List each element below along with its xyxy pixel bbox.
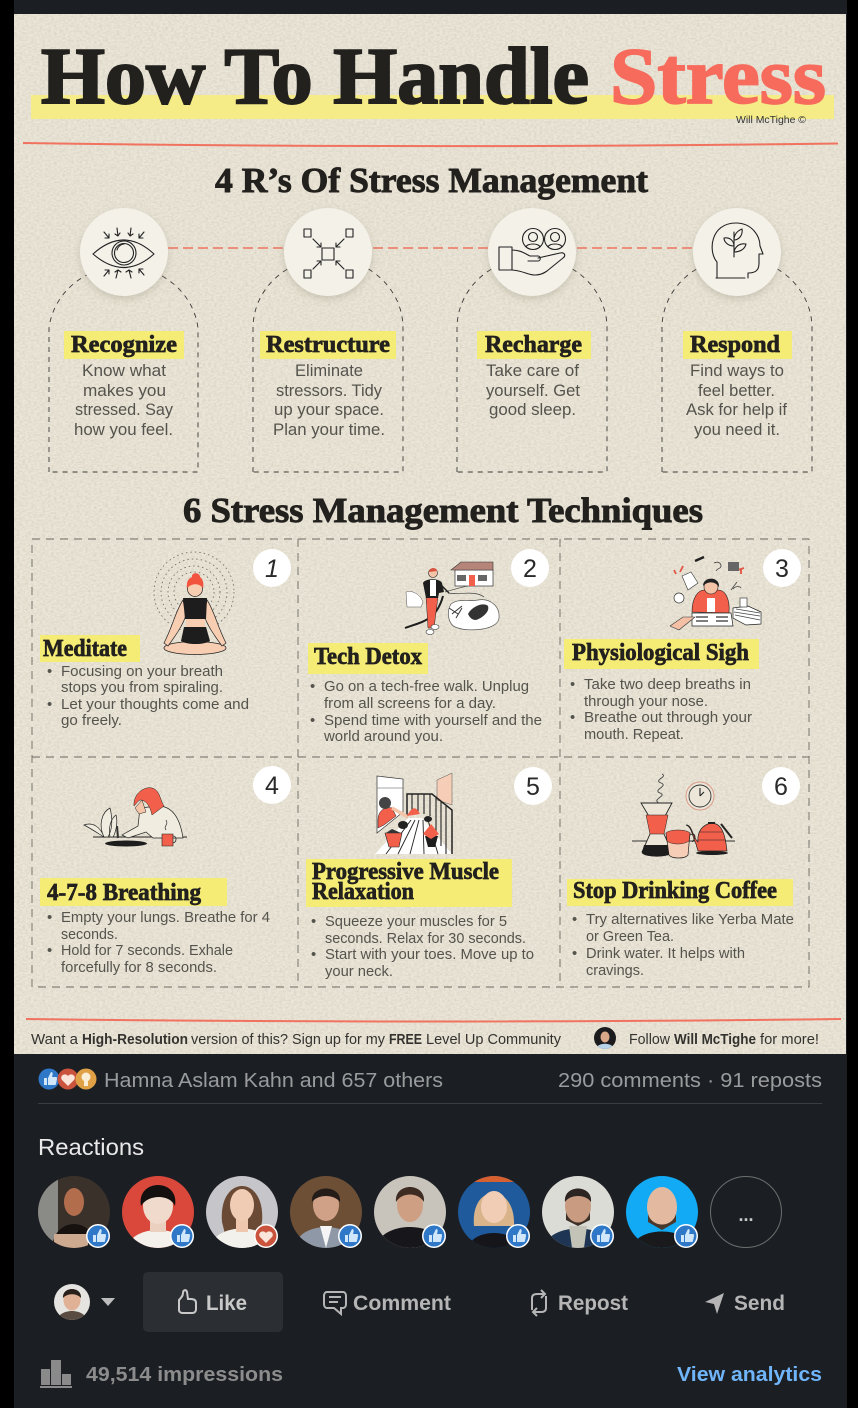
- description: Restructure: Eliminate: [295, 361, 363, 380]
- panel: technique 2 Tech Detox: [308, 549, 549, 745]
- text: Breathing bullets: forcefully for 8 seconds.: [61, 960, 217, 976]
- panel: technique 5 Progressive Muscle Relaxation: [306, 767, 552, 980]
- illustration: balcony with plants: [375, 773, 452, 854]
- number badge 2: 2: [523, 555, 537, 583]
- description: Recharge: [486, 361, 580, 419]
- text: Physiological Sigh bullets: •: [570, 677, 575, 693]
- label: Recognize: Recognize: [71, 332, 177, 358]
- button: Repost: Repost: [558, 1292, 628, 1315]
- reaction icons: [38, 1068, 96, 1090]
- panel: Recharge: [457, 208, 607, 472]
- label: Restructure: Restructure: [266, 332, 390, 358]
- text: Coffee bullets: cravings.: [586, 963, 644, 979]
- text: Physiological Sigh bullets: Take two deep breaths in: [584, 677, 751, 693]
- connector: dashed red line: [168, 247, 692, 249]
- description: Recharge: Take care of: [486, 361, 579, 380]
- reactions heading: Reactions: [38, 1134, 144, 1160]
- text: Tech Detox bullets: [310, 679, 542, 745]
- label: Stop Drinking Coffee: Stop Drinking Coffee: [573, 878, 777, 904]
- label: Tech Detox: Tech Detox: [314, 644, 422, 670]
- text: Muscle Relaxation bullets: •: [311, 947, 316, 963]
- number badge 1: 1: [265, 555, 279, 583]
- text: Coffee bullets: Drink water. It helps with: [586, 946, 745, 962]
- text: Physiological Sigh bullets: Breathe out through your: [584, 710, 752, 726]
- text: Meditate bullets: [47, 664, 249, 729]
- text: Tech Detox bullets: Spend time with yourself and the: [324, 713, 542, 729]
- avatar 2: [122, 1176, 194, 1248]
- text: Meditate bullets: •: [47, 664, 52, 680]
- text: Breathing bullets: Empty your lungs. Breathe for 4: [61, 910, 270, 926]
- label: Progressive Muscle Relaxation: Progressive Muscle: [312, 859, 499, 885]
- text: Physiological Sigh bullets: •: [570, 710, 575, 726]
- bottom red divider: [26, 1019, 841, 1022]
- text: Physiological Sigh bullets: mouth. Repeat.: [584, 727, 684, 743]
- button: Send: Send: [734, 1292, 785, 1315]
- title: [31, 33, 834, 121]
- text: Meditate bullets: stops you from spiraling.: [61, 680, 223, 696]
- view analytics link: View analytics: [677, 1364, 822, 1386]
- label: Recharge: Recharge: [485, 332, 582, 358]
- arch outline: [662, 258, 812, 472]
- arch outline: [49, 266, 198, 472]
- icon circle: eye: [80, 208, 168, 299]
- number badge 6: 6: [774, 773, 788, 801]
- reactions summary: Hamna Aslam Kahn and 657 others: [104, 1070, 443, 1092]
- avatar 1: [38, 1176, 110, 1248]
- illustration: meditating woman: [154, 552, 234, 654]
- description: Restructure: stressors. Tidy: [276, 381, 382, 400]
- footer sign-up line: Level Up Community: [426, 1031, 561, 1048]
- footer sign-up line: Want a: [31, 1031, 79, 1048]
- footer sign-up line: High-Resolution: [82, 1031, 188, 1048]
- author credit: Will McTighe ©: [736, 115, 807, 126]
- impressions count: 49,514 impressions: [86, 1364, 283, 1386]
- heading: 6 techniques: 6 Stress Management Techniques: [183, 491, 703, 530]
- text: Tech Detox bullets: •: [310, 713, 315, 729]
- panel: technique 3 Physiological Sigh: [564, 549, 801, 743]
- number badge 2: [511, 549, 549, 587]
- description: Recharge: good sleep.: [489, 400, 576, 419]
- description: Respond: Ask for help if: [686, 400, 787, 419]
- avatar 7: [542, 1176, 614, 1248]
- title highlight band: [31, 95, 834, 119]
- avatar 4: [290, 1176, 362, 1248]
- button: Like: Like: [206, 1292, 247, 1315]
- description: Recognize: stressed. Say: [75, 400, 173, 419]
- text: Muscle Relaxation bullets: [311, 914, 534, 980]
- avatar 3: [206, 1176, 278, 1248]
- text: Tech Detox bullets: world around you.: [323, 729, 443, 745]
- illustration: stressed student at desk: [670, 557, 761, 630]
- number badge 1: [253, 549, 291, 587]
- description: Recognize: Know what: [82, 361, 166, 380]
- text: Breathing bullets: [47, 910, 270, 976]
- arch outline: [457, 258, 607, 472]
- panel: technique 4 Breathing: [40, 766, 291, 976]
- number badge 6: [762, 767, 800, 805]
- footer sign-up line: [31, 1031, 561, 1048]
- button: Comment: Comment: [353, 1292, 451, 1315]
- more reactions button: [710, 1176, 782, 1248]
- footer follow line: Follow: [629, 1031, 670, 1048]
- footer follow line: Will McTighe: [674, 1031, 756, 1048]
- text: Meditate bullets: •: [47, 697, 52, 713]
- current user avatar: [54, 1284, 90, 1320]
- title dark words: How To Handle: [41, 33, 589, 121]
- text: Coffee bullets: •: [572, 946, 577, 962]
- label: Progressive Muscle Relaxation: [306, 859, 512, 907]
- description: Restructure: Plan your time.: [273, 420, 385, 439]
- illustration: coffee set: [632, 774, 735, 858]
- text: Meditate bullets: go freely.: [61, 713, 122, 729]
- number badge 3: [763, 549, 801, 587]
- description: Recognize: how you feel.: [74, 420, 173, 439]
- title accent word: Stress: [610, 33, 826, 121]
- text: Breathing bullets: •: [47, 943, 52, 959]
- text: Coffee bullets: [572, 912, 794, 979]
- footer sign-up line: FREE: [389, 1031, 422, 1048]
- description: Respond: feel better.: [698, 381, 775, 400]
- top red divider: [23, 143, 838, 146]
- heading: 4 Rs: 4 R’s Of Stress Management: [215, 161, 648, 200]
- text: Muscle Relaxation bullets: seconds. Relax for 30 seconds.: [325, 931, 526, 947]
- text: Tech Detox bullets: •: [310, 679, 315, 695]
- avatar 8: [626, 1176, 698, 1248]
- footer sign-up line: version of this? Sign up for my: [191, 1031, 385, 1048]
- number badge 4: 4: [265, 772, 279, 800]
- arch outline: [253, 258, 403, 472]
- text: Tech Detox bullets: from all screens for a day.: [324, 696, 496, 712]
- button: Send: [705, 1292, 785, 1315]
- text: Physiological Sigh bullets: [570, 677, 752, 743]
- footer follow line: [629, 1031, 819, 1048]
- button: Like: [143, 1272, 283, 1332]
- text: Coffee bullets: Try alternatives like Yerba Mate: [586, 912, 794, 928]
- button: Repost: [532, 1290, 628, 1316]
- description: Respond: you need it.: [694, 420, 780, 439]
- text: Muscle Relaxation bullets: Start with your toes. Move up to: [325, 947, 534, 963]
- text: Coffee bullets: •: [572, 912, 577, 928]
- avatar 5: [374, 1176, 446, 1248]
- description: Respond: Find ways to: [690, 361, 784, 380]
- techniques dashed grid: [32, 539, 809, 987]
- text: Muscle Relaxation bullets: Squeeze your muscles for 5: [325, 914, 507, 930]
- text: Coffee bullets: or Green Tea.: [586, 929, 674, 945]
- description: Recognize: [74, 361, 173, 439]
- avatar row: [38, 1176, 782, 1248]
- illustration: man in garden: [405, 562, 499, 634]
- panel: Recognize: [49, 208, 198, 472]
- comments and reposts: 290 comments · 91 reposts: [558, 1070, 822, 1092]
- text: Meditate bullets: Let your thoughts come and: [61, 697, 249, 713]
- text: Muscle Relaxation bullets: your neck.: [325, 964, 393, 980]
- footer follow line: for more!: [760, 1031, 819, 1048]
- text: Muscle Relaxation bullets: •: [311, 914, 316, 930]
- panel: technique 6 Stop Drinking Coffee: [567, 767, 800, 979]
- number badge 3: 3: [775, 555, 789, 583]
- number badge 5: 5: [526, 773, 540, 801]
- description: Restructure: up your space.: [274, 400, 384, 419]
- label: Progressive Muscle Relaxation: Relaxation: [312, 879, 414, 905]
- more reactions button: ...: [738, 1205, 754, 1225]
- paper poster background: [14, 14, 846, 1054]
- description: Restructure: [273, 361, 385, 439]
- panel: Respond: [662, 208, 812, 472]
- text: Meditate bullets: Focusing on your breath: [61, 664, 223, 680]
- icon circle: hand holding people: [488, 208, 576, 299]
- panel: Restructure: [253, 208, 403, 472]
- text: Physiological Sigh bullets: through your nose.: [584, 694, 708, 710]
- text: Breathing bullets: •: [47, 910, 52, 926]
- icon circle: head with plant: [693, 208, 781, 299]
- description: Recognize: makes you: [83, 381, 166, 400]
- illustration: woman writing: [84, 788, 187, 846]
- label: 4-7-8 Breathing: 4-7-8 Breathing: [47, 880, 201, 906]
- icon: impressions bars: [40, 1360, 72, 1388]
- label: Respond: Respond: [690, 332, 781, 358]
- label: Meditate: Meditate: [43, 636, 127, 662]
- description: Respond: [686, 361, 787, 439]
- label: Physiological Sigh: Physiological Sigh: [572, 640, 749, 666]
- text: Breathing bullets: Hold for 7 seconds. Exhale: [61, 943, 233, 959]
- footer author avatar: [594, 1027, 616, 1049]
- avatar 6: [458, 1176, 530, 1248]
- panel: technique 1 Meditate: [40, 549, 291, 729]
- caret: [101, 1298, 115, 1306]
- number badge 4: [253, 766, 291, 804]
- description: Recharge: yourself. Get: [486, 381, 580, 400]
- number badge 5: [514, 767, 552, 805]
- text: Tech Detox bullets: Go on a tech-free walk. Unplug: [324, 679, 529, 695]
- text: Breathing bullets: seconds.: [61, 927, 118, 943]
- icon circle: network: [284, 208, 372, 299]
